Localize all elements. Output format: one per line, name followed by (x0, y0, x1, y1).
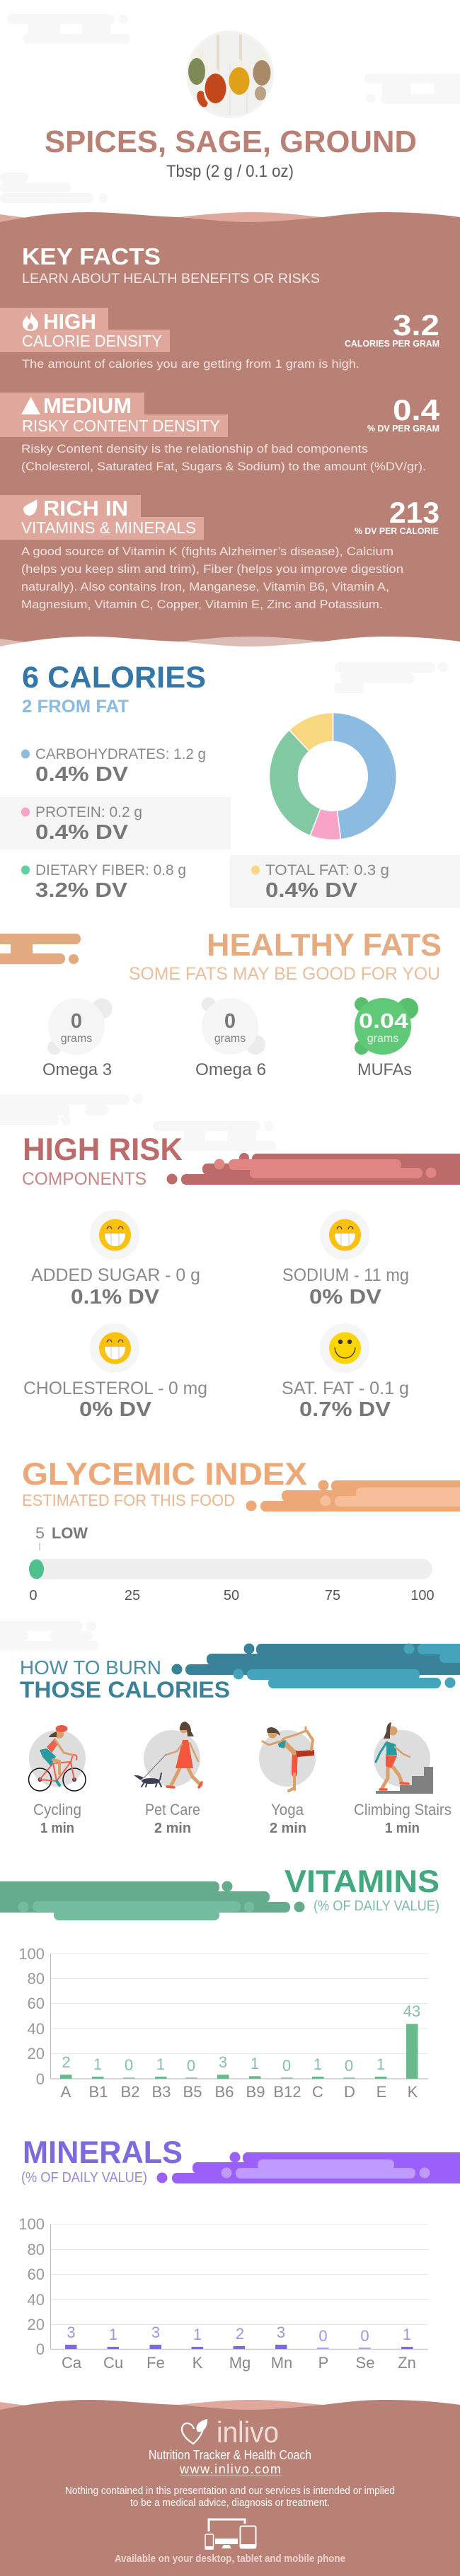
added sugar (31, 1210, 200, 1309)
decorative band (167, 1153, 460, 1185)
icon: woman walking dog (134, 1722, 202, 1787)
bar chart: vitamins: 80 (28, 1970, 45, 1988)
healthy fats heading: HEALTHY FATS (207, 928, 442, 963)
bar chart: vitamins: 20 (28, 2045, 45, 2062)
vitamins subheading: (% OF DAILY VALUE) (314, 1898, 439, 1914)
omega 6 (195, 997, 266, 1079)
icon: smile face (329, 1333, 361, 1364)
activity: yoga (259, 1727, 316, 1836)
from fat subheading: 2 FROM FAT (22, 697, 129, 716)
bar chart: minerals: 100 (18, 2215, 45, 2233)
icon: devices (205, 2519, 256, 2549)
key facts heading: KEY FACTS (22, 244, 161, 270)
rich in value (355, 496, 439, 536)
risky content description: (Cholesterol, Saturated Fat, Sugars & Sodium) to the amount (%DV/gr). (21, 460, 426, 473)
bar chart: vitamins: 1 (93, 2055, 102, 2073)
legend: carbohydrates (21, 746, 206, 786)
icon: cyclist (28, 1725, 86, 1791)
bottom wave (0, 637, 460, 658)
disclaimer (65, 2485, 395, 2509)
panel: how to burn (20, 1644, 460, 1836)
bar chart: vitamins: 40 (28, 2020, 45, 2038)
bar chart: minerals: 0 (36, 2340, 45, 2358)
bar chart: vitamins: 1 (156, 2055, 165, 2073)
bar chart: minerals: Se (356, 2354, 374, 2372)
activity: pet care (134, 1722, 202, 1836)
healthy fats subheading: SOME FATS MAY BE GOOD FOR YOU (129, 964, 440, 984)
gauge value: 5 (35, 1524, 45, 1542)
rich in value: 213 (389, 496, 439, 529)
calorie density value (345, 308, 439, 349)
legend: dietary fiber: DIETARY FIBER: 0.8 g (35, 862, 186, 878)
activity: pet care: Pet Care (145, 1801, 200, 1818)
activity: climbing stairs (354, 1722, 452, 1836)
bar chart: vitamins: 60 (28, 1995, 45, 2012)
mufas: MUFAs (357, 1060, 412, 1079)
icon: warning triangle (21, 397, 40, 414)
legend: carbohydrates: 0.4% DV (35, 763, 129, 786)
legend: carbohydrates: CARBOHYDRATES: 1.2 g (35, 746, 206, 762)
bar chart: vitamins: K (408, 2083, 418, 2101)
bar chart: vitamins: 0 (282, 2057, 291, 2075)
bar chart: minerals: 2 (236, 2325, 244, 2343)
bar chart: minerals: 0 (318, 2327, 328, 2345)
icon: grin face (99, 1333, 131, 1364)
bar chart: vitamins: 100 (18, 1945, 45, 1963)
bar chart: minerals: Mg (229, 2354, 251, 2372)
tagline: Nutrition Tracker & Health Coach (149, 2448, 311, 2462)
gauge value (35, 1524, 88, 1550)
added sugar: 0.1% DV (71, 1286, 160, 1309)
icon: grin face (329, 1219, 361, 1251)
bar chart: minerals: 60 (28, 2265, 45, 2283)
calorie density value: 3.2 (393, 308, 439, 342)
panel: minerals (18, 2135, 460, 2372)
bar chart: vitamins: 2 (62, 2053, 71, 2071)
bar chart: minerals: 40 (28, 2291, 45, 2309)
icon: woman climbing stairs (376, 1722, 433, 1794)
panel: glycemic index (22, 1457, 460, 1603)
calorie density badge (0, 308, 170, 352)
top wave (0, 212, 460, 233)
rich in badge (0, 495, 204, 540)
legend highlight boxes (0, 797, 460, 907)
risky content badge (0, 393, 228, 437)
legend: total fat: 0.4% DV (265, 879, 358, 902)
cholesterol: 0% DV (79, 1398, 152, 1421)
risky content value: 0.4 (393, 393, 440, 427)
burn heading: THOSE CALORIES (20, 1677, 230, 1702)
bar chart: minerals: 20 (28, 2316, 45, 2333)
panel: vitamins (0, 1864, 439, 2101)
footer wave (0, 2400, 460, 2576)
activity: yoga: Yoga (271, 1801, 304, 1818)
icon: leaf (23, 499, 38, 516)
bar chart: vitamins (18, 1945, 428, 2101)
vitamins heading: VITAMINS (284, 1864, 439, 1899)
food photo: spices on spoons (186, 30, 274, 118)
risky content badge: RISKY CONTENT DENSITY (22, 417, 220, 435)
saturated fat: 0.7% DV (299, 1398, 391, 1421)
activity: climbing stairs: Climbing Stairs (354, 1801, 452, 1818)
donut chart (270, 713, 396, 840)
calorie density description: The amount of calories you are getting from 1 gram is high. (22, 357, 360, 371)
cholesterol (23, 1323, 207, 1421)
calories heading: 6 CALORIES (22, 661, 206, 695)
gauge scale: 0 (29, 1588, 38, 1603)
sodium: 0% DV (309, 1286, 382, 1309)
rich in description: naturally). Also contains Iron, Manganese, Vitamin B6, Vitamin A, (21, 580, 389, 593)
gauge scale: 50 (224, 1588, 239, 1603)
saturated fat (282, 1323, 409, 1421)
background clouds: high risk (0, 1094, 276, 1151)
bar chart: minerals: 1 (193, 2326, 202, 2343)
bar chart: vitamins: 1 (314, 2055, 322, 2073)
availability note: Available on your desktop, tablet and mobile phone (115, 2553, 345, 2565)
bar chart: minerals: 3 (151, 2323, 160, 2341)
mufas: grams (367, 1033, 398, 1045)
bar chart: vitamins: 1 (376, 2055, 385, 2073)
burn heading: HOW TO BURN (20, 1657, 161, 1678)
added sugar: ADDED SUGAR - 0 g (31, 1265, 200, 1285)
bar chart: minerals: P (318, 2354, 328, 2372)
panel: footer (0, 2400, 460, 2576)
bar chart: minerals: Mn (271, 2354, 292, 2372)
rich in badge: RICH IN (43, 497, 128, 521)
rich in description: (helps you keep slim and trim), Fiber (helps you improve digestion (21, 562, 403, 576)
panel: healthy fats (0, 928, 442, 1079)
gauge scale: 75 (325, 1588, 340, 1603)
legend: protein: 0.4% DV (35, 821, 129, 844)
omega 6: grams (214, 1033, 246, 1045)
panel: high risk (22, 1132, 460, 1421)
bar chart: vitamins: B12 (273, 2083, 301, 2101)
disclaimer: to be a medical advice, diagnosis or treatment. (130, 2497, 330, 2509)
logo: inlivo: inlivo (217, 2415, 279, 2449)
mufas (355, 997, 418, 1079)
icon: grin face (99, 1219, 131, 1251)
legend: protein (21, 804, 142, 844)
high risk subheading: COMPONENTS (22, 1169, 146, 1189)
panel: calories (0, 661, 460, 907)
bar chart: vitamins: B3 (152, 2083, 171, 2101)
bar chart: vitamins: B6 (215, 2083, 234, 2101)
legend: total fat: TOTAL FAT: 0.3 g (265, 862, 389, 878)
omega 3: 0 (71, 1010, 82, 1033)
omega 3 (42, 998, 112, 1079)
gauge track (29, 1559, 432, 1579)
activity: climbing stairs: 1 min (385, 1821, 420, 1836)
title: SPICES, SAGE, GROUND (45, 125, 417, 159)
saturated fat: SAT. FAT - 0.1 g (282, 1379, 409, 1398)
bar chart: vitamins: 3 (219, 2053, 227, 2071)
legend: total fat (251, 862, 389, 902)
omega 6: 0 (224, 1010, 236, 1033)
sodium (282, 1210, 409, 1309)
decorative band (0, 934, 81, 964)
bar chart: vitamins: B9 (246, 2083, 265, 2101)
bar chart: vitamins: C (312, 2083, 323, 2101)
gauge value: LOW (52, 1524, 88, 1542)
sodium: SODIUM - 11 mg (282, 1265, 409, 1285)
rich in description (21, 545, 403, 611)
omega 3: Omega 3 (42, 1060, 112, 1079)
gauge scale (29, 1588, 435, 1603)
bar chart: vitamins: 0 (187, 2057, 195, 2075)
gauge scale: 100 (410, 1588, 435, 1603)
bar chart: minerals: 3 (277, 2323, 285, 2341)
mufas: 0.04 (359, 1010, 408, 1033)
bar chart: vitamins: 0 (125, 2056, 133, 2074)
omega 3: grams (61, 1033, 92, 1045)
icon: yoga pose (263, 1727, 314, 1791)
activity: cycling (28, 1725, 86, 1836)
risky content description: Risky Content density is the relationship of bad components (21, 442, 368, 456)
bar chart: vitamins: 1 (251, 2055, 259, 2072)
key facts subheading: LEARN ABOUT HEALTH BENEFITS OR RISKS (22, 272, 320, 286)
bar chart: minerals (18, 2215, 428, 2372)
background cloud: calories (335, 662, 448, 693)
bar chart: minerals: Ca (62, 2354, 82, 2372)
calorie density value: CALORIES PER GRAM (345, 338, 439, 349)
serving size: Tbsp (2 g / 0.1 oz) (166, 162, 294, 181)
bar chart: minerals: 1 (109, 2326, 117, 2343)
glycemic subheading: ESTIMATED FOR THIS FOOD (22, 1491, 235, 1509)
disclaimer: Nothing contained in this presentation and our services is intended or implied (65, 2485, 395, 2497)
bar chart: minerals: Zn (398, 2354, 416, 2372)
calorie density badge: HIGH (43, 310, 96, 334)
bar chart: minerals: 1 (403, 2326, 411, 2343)
bar chart: vitamins: E (376, 2083, 386, 2101)
legend: protein: PROTEIN: 0.2 g (35, 804, 142, 820)
bar chart: minerals: Fe (146, 2354, 165, 2372)
background cloud: burn (0, 1621, 98, 1651)
bar chart: vitamins: 0 (36, 2070, 45, 2088)
bar chart: vitamins: B1 (89, 2083, 108, 2101)
rich in value: % DV PER CALORIE (355, 526, 439, 536)
decorative band (246, 1480, 460, 1512)
minerals heading: MINERALS (23, 2135, 183, 2170)
bar chart: minerals: Cu (103, 2354, 123, 2372)
gauge scale: 25 (125, 1588, 140, 1603)
activity: pet care: 2 min (154, 1821, 191, 1836)
bar chart: minerals: 80 (28, 2241, 45, 2258)
rich in badge: VITAMINS & MINERALS (21, 518, 196, 537)
logo: inlivo (182, 2415, 279, 2449)
bar chart: vitamins: B2 (121, 2083, 139, 2101)
bar chart: minerals: 3 (67, 2323, 76, 2341)
risky content value (367, 393, 440, 434)
minerals subheading: (% OF DAILY VALUE) (21, 2170, 147, 2186)
bar chart: vitamins: 43 (403, 2002, 420, 2020)
bar chart: vitamins: D (344, 2083, 355, 2101)
bar chart: vitamins: B5 (183, 2083, 202, 2101)
bar chart: vitamins: A (61, 2083, 71, 2101)
background clouds: header (0, 14, 460, 203)
website link: www.inlivo.com (179, 2462, 281, 2476)
activity: cycling: Cycling (33, 1801, 81, 1818)
omega 6: Omega 6 (195, 1060, 266, 1079)
decorative band (0, 1881, 304, 1920)
glycemic heading: GLYCEMIC INDEX (22, 1457, 307, 1492)
panel: key facts (0, 212, 460, 658)
decorative band (171, 1644, 460, 1688)
decorative band (157, 2152, 460, 2183)
burn heading (20, 1657, 230, 1702)
bar chart: vitamins: 0 (345, 2057, 353, 2075)
icon: flame (23, 312, 38, 331)
legend: dietary fiber: 3.2% DV (35, 879, 128, 902)
activity: yoga: 2 min (270, 1821, 306, 1836)
risky content badge: MEDIUM (43, 394, 132, 418)
activity: cycling: 1 min (40, 1821, 74, 1836)
cholesterol: CHOLESTEROL - 0 mg (23, 1379, 207, 1398)
bar chart: minerals: 0 (360, 2327, 369, 2345)
risky content description (21, 442, 426, 473)
high risk heading: HIGH RISK (23, 1132, 183, 1167)
rich in description: Magnesium, Vitamin C, Copper, Vitamin E, Zinc and Potassium. (21, 598, 383, 611)
legend: dietary fiber (21, 862, 186, 902)
risky content value: % DV PER GRAM (367, 423, 439, 434)
calorie density badge: CALORIE DENSITY (22, 332, 162, 350)
bar chart: minerals: K (192, 2354, 203, 2372)
rich in description: A good source of Vitamin K (fights Alzheimer’s disease), Calcium (21, 545, 393, 558)
